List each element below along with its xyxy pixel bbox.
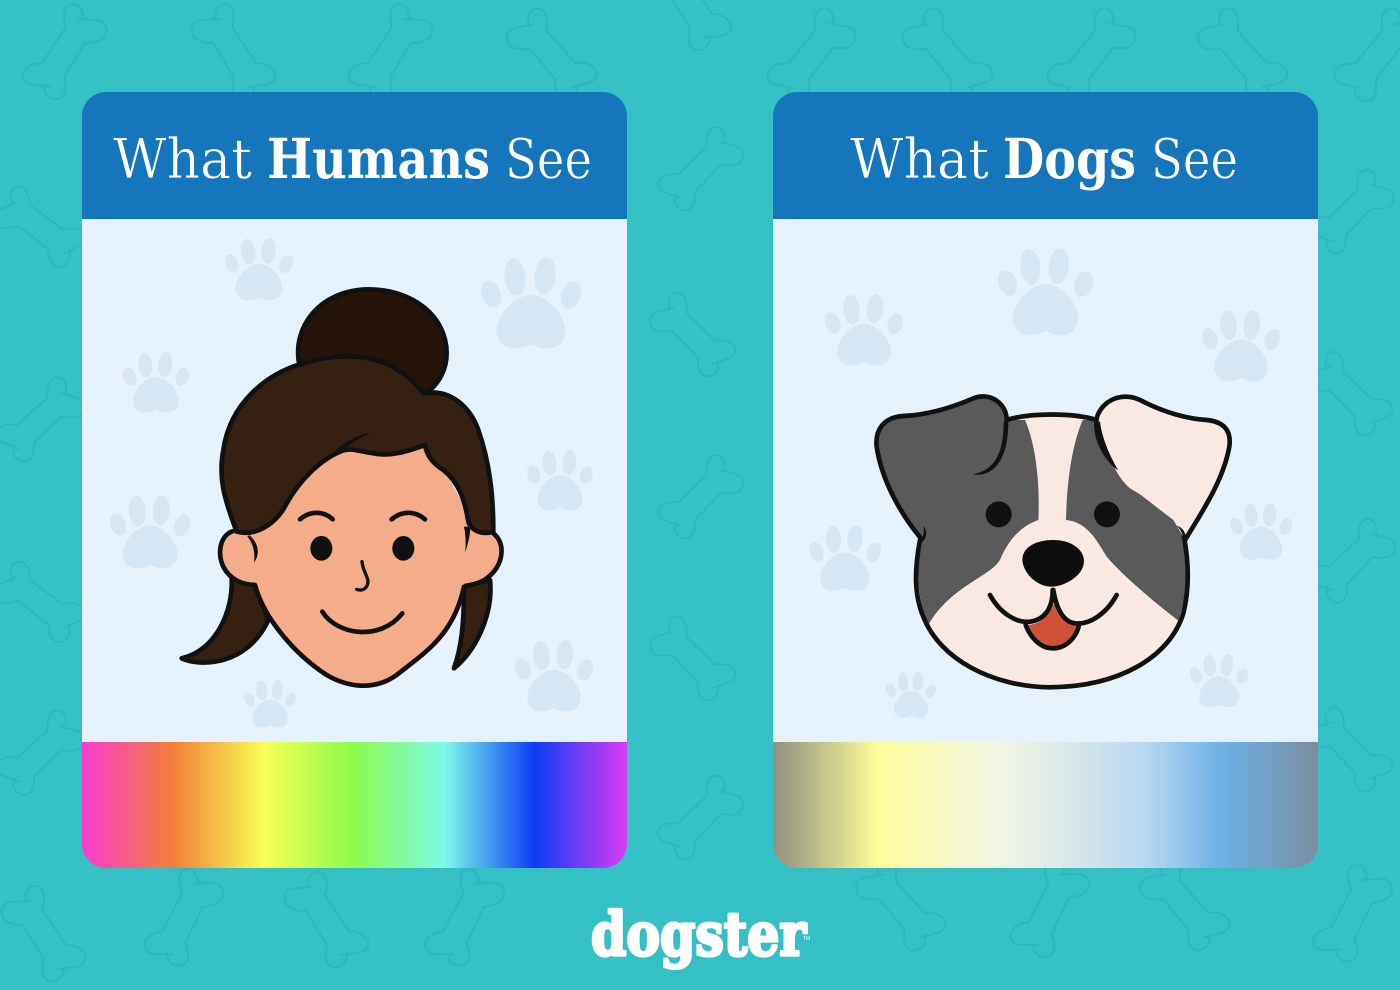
logo: dogster: TM xyxy=(803,936,810,942)
heading: what dogs see: Dogs xyxy=(1003,126,1136,191)
heading: what dogs see: What xyxy=(850,127,989,191)
heading: what humans see xyxy=(113,126,592,191)
card body xyxy=(82,219,627,742)
header bar xyxy=(773,92,1318,219)
paw prints xyxy=(806,247,1294,718)
paw prints xyxy=(107,237,596,728)
heading: what dogs see xyxy=(850,126,1238,191)
panel: what dogs see xyxy=(773,92,1318,868)
heading: what humans see: What xyxy=(113,127,252,191)
card body xyxy=(773,219,1318,742)
human colour spectrum bar xyxy=(82,742,627,868)
panel: what humans see xyxy=(82,92,627,868)
logo: dogster: dogster xyxy=(591,900,807,970)
heading: what humans see: Humans xyxy=(267,126,490,191)
heading: what humans see: See xyxy=(505,127,592,191)
icon: woman's face xyxy=(182,289,502,686)
header bar xyxy=(82,92,627,219)
dog colour spectrum bar xyxy=(773,742,1318,868)
icon: dog's face xyxy=(876,396,1230,687)
heading: what dogs see: See xyxy=(1151,127,1238,191)
